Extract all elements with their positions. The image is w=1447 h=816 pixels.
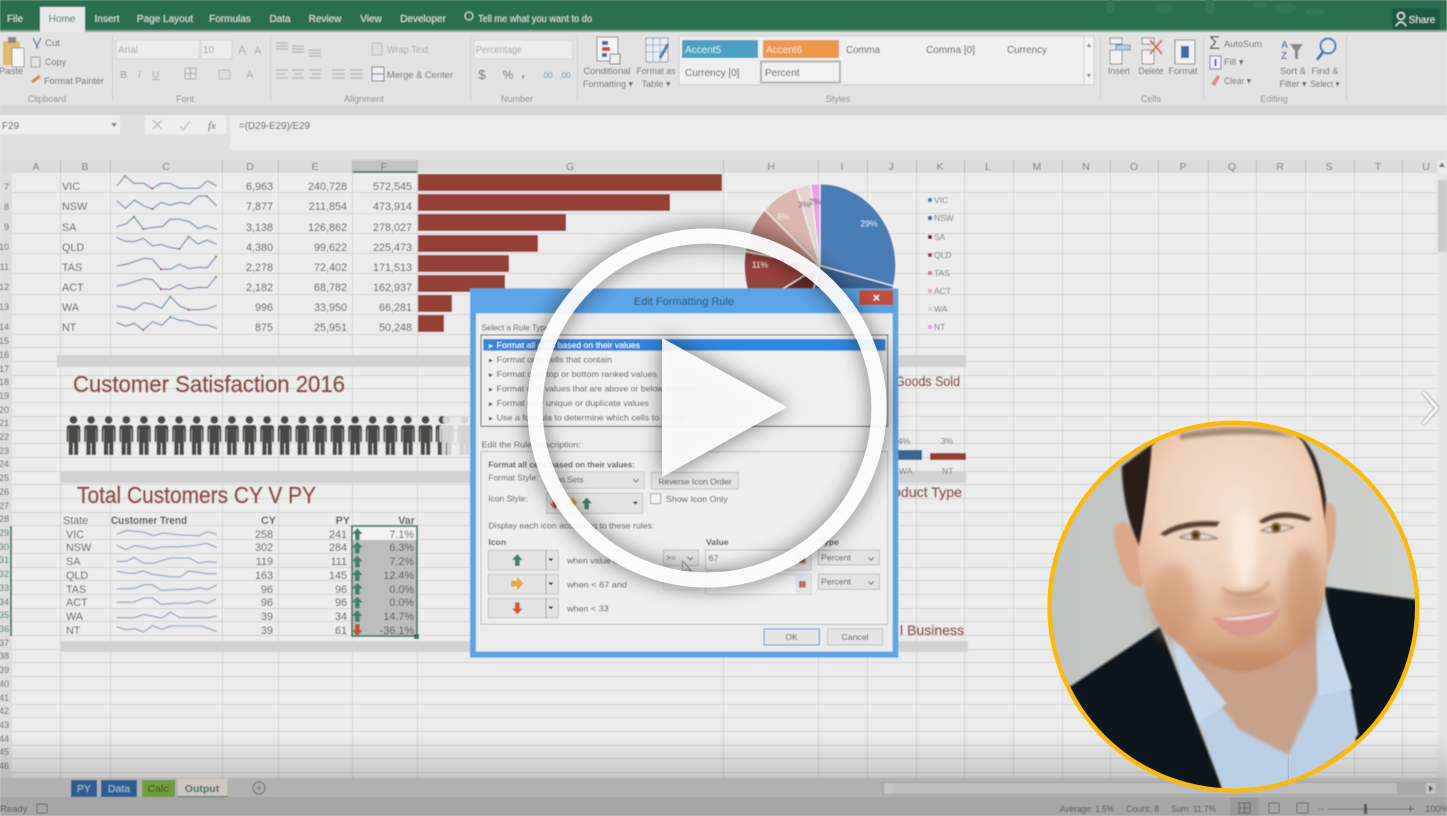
clipboard group: Clipboard: [28, 94, 66, 104]
eyes: [1180, 523, 1293, 540]
column headers: [0, 160, 1437, 173]
editing group: Sort &: [1280, 66, 1307, 77]
state data table: 66,281: [379, 302, 412, 314]
partially hidden chart headings: oduct Type: [893, 484, 962, 500]
state data table: TAS: [62, 262, 82, 274]
state data table: QLD: [62, 242, 84, 254]
alignment group: Wrap Text: [387, 45, 428, 56]
shirt: [1172, 602, 1358, 790]
edit formatting rule dialog: [470, 288, 898, 658]
state data table: NSW: [62, 201, 88, 213]
title bar tabs: Review: [309, 14, 342, 25]
cells group: Format: [1168, 66, 1198, 77]
state data table: 126,862: [308, 222, 347, 234]
rule type list: Format only top or bottom ranked values: [497, 369, 658, 379]
ribbon: [0, 32, 1447, 115]
mouth: [1213, 609, 1281, 637]
number group: ,: [521, 66, 525, 80]
styles gallery: Accent5: [685, 45, 722, 56]
customer table: 284: [329, 542, 347, 554]
sheet tabs bar: [0, 778, 1447, 798]
customer table: 302: [255, 542, 273, 554]
state data table: 171,513: [373, 262, 412, 274]
column headers: T: [1375, 161, 1382, 173]
bottom vignette: [0, 735, 1447, 778]
state data table: 211,854: [309, 201, 347, 213]
customer table: 39: [261, 625, 273, 637]
conditional formatting buttons: Formatting ▾: [583, 79, 633, 90]
pie legend: NT: [934, 322, 945, 332]
partially hidden chart headings: NT: [942, 466, 953, 476]
clipboard group: Copy: [45, 57, 66, 68]
customer table: QLD: [66, 570, 88, 582]
state data table: 25,951: [314, 322, 347, 334]
pie legend: VIC: [934, 195, 948, 205]
column headers: K: [936, 161, 944, 173]
nose: [1223, 581, 1269, 594]
heading: total customers: Total Customers CY V PY: [77, 482, 316, 508]
state data table: 33,950: [314, 302, 347, 314]
face: [1138, 425, 1327, 672]
styles gallery: Styles: [826, 94, 851, 104]
sheet tabs bar: Calc: [147, 783, 169, 795]
cancel button: [828, 629, 883, 645]
state data table: 7,877: [246, 201, 273, 213]
formula bar: [0, 115, 1447, 160]
formula bar: F29: [2, 121, 20, 132]
state data table: 4,380: [246, 242, 273, 254]
customer table: 145: [329, 570, 347, 582]
pie legend: SA: [934, 232, 946, 242]
customer table: Customer Trend: [111, 515, 187, 527]
column headers: O: [1130, 161, 1138, 173]
sparklines with high and low markers: [117, 175, 217, 331]
font group: I: [138, 70, 141, 81]
icon rule rows: when < 67 and: [566, 580, 627, 590]
photo: [1052, 425, 1415, 788]
title bar tabs: Formulas: [209, 14, 251, 25]
state data table: 162,937: [373, 282, 412, 294]
cheek and nose shading: [1150, 510, 1322, 667]
partially hidden chart headings: l Business: [900, 622, 964, 638]
customer table: 258: [255, 529, 273, 541]
customer table: NSW: [66, 542, 92, 554]
editing group: Filter ▾: [1280, 79, 1307, 90]
customer trend sparklines: [117, 530, 217, 632]
rule description box: Icon Sets: [549, 475, 584, 485]
status bar: [0, 797, 1447, 816]
icon rule rows: when < 33: [566, 604, 609, 614]
icon rule rows: 67: [709, 553, 718, 563]
collar: [1172, 602, 1352, 723]
status bar: Ready: [0, 804, 28, 815]
alignment group: Alignment: [344, 94, 385, 104]
customer table: 34: [335, 611, 347, 623]
font group: A: [254, 45, 262, 57]
customer table: PY: [336, 515, 351, 527]
state data table: NT: [62, 322, 77, 334]
state data table: 68,782: [314, 282, 347, 294]
state data table: ACT: [62, 282, 84, 294]
play button: [535, 236, 879, 580]
customer table: WA: [66, 611, 84, 623]
font group: Arial: [118, 45, 138, 56]
title bar tabs: File: [7, 14, 23, 25]
title bar tabs: Data: [269, 14, 291, 25]
customer table: 0.0%: [389, 584, 414, 596]
icon rule rows: Percent: [821, 552, 851, 562]
icon rule rows: when value is: [566, 555, 620, 565]
customer table: 7.2%: [389, 556, 414, 568]
column headers: B: [81, 161, 89, 173]
pie chart: 8%: [777, 212, 790, 222]
presenter portrait: [1040, 410, 1430, 800]
number group: Number: [501, 94, 533, 104]
column headers: S: [1325, 161, 1333, 173]
cells group: Delete: [1138, 66, 1164, 77]
rule type list: Format only values that are above or below average: [497, 384, 698, 394]
column headers: I: [841, 161, 843, 173]
state data table: 50,248: [379, 322, 412, 334]
rule description box: Format Style:: [488, 472, 538, 482]
state data table: 2,182: [246, 282, 273, 294]
customer table: -36.1%: [380, 625, 414, 637]
editing group: AutoSum: [1224, 39, 1262, 50]
customer table: [63, 515, 419, 639]
conditional formatting buttons: Format as: [636, 66, 676, 77]
alignment group: [276, 43, 453, 104]
next slide chevron: [1423, 392, 1437, 424]
customer table: 39: [261, 611, 273, 623]
title bar tabs: Developer: [400, 14, 446, 25]
customer table: VIC: [66, 529, 84, 541]
status bar: Count: 8: [1126, 804, 1159, 815]
rule description box: Show Icon Only: [666, 494, 728, 504]
font group: B: [120, 70, 127, 81]
column headers: G: [566, 161, 574, 173]
hair: [1122, 435, 1326, 550]
pie legend: WA: [934, 304, 948, 314]
editing group: Clear ▾: [1224, 76, 1251, 87]
customer table: 119: [256, 556, 273, 568]
partially hidden chart headings: WA: [899, 466, 913, 476]
pie chart: 29%: [860, 219, 878, 229]
edit formatting rule dialog: Select a Rule Type:: [482, 322, 552, 332]
pie chart: 11%: [752, 260, 769, 270]
rule type list: ►: [488, 372, 494, 379]
styles gallery: Percent: [765, 68, 800, 79]
column headers: F: [381, 161, 387, 173]
state data table: [62, 181, 412, 334]
rule type list: ►: [488, 416, 494, 423]
customer table: CY: [261, 515, 277, 527]
pie legend: NSW: [934, 213, 954, 223]
row headers: 9: [4, 222, 9, 232]
number group: Percentage: [476, 45, 522, 56]
rule description box: Icon: [488, 537, 506, 547]
neck: [1183, 623, 1318, 755]
customer table: NT: [66, 625, 81, 637]
number group: %: [503, 68, 514, 82]
state data table: 473,914: [373, 201, 412, 213]
dialog title: Edit Formatting Rule: [634, 296, 734, 308]
customer table: 7.1%: [389, 529, 414, 541]
icon rule rows: >=: [666, 553, 676, 563]
clipboard group: Format Painter: [44, 76, 104, 87]
customer table: 14.7%: [383, 611, 414, 623]
customer table: 111: [331, 556, 347, 568]
rule type list: Use a formula to determine which cells to format: [497, 413, 687, 423]
column headers: D: [246, 161, 254, 173]
title bar tabs: Share: [1409, 15, 1436, 26]
title bar tabs: Tell me what you want to do: [478, 14, 592, 25]
state data table: 72,402: [314, 262, 347, 274]
font group: Font: [176, 94, 195, 104]
rule type list: Format only unique or duplicate values: [497, 398, 650, 408]
state data table: 225,473: [373, 242, 412, 254]
styles gallery: Currency [0]: [685, 68, 740, 79]
customer table: 6.3%: [389, 542, 414, 554]
customer table: 61: [335, 625, 347, 637]
rule description box: Value: [706, 537, 729, 547]
state data table: 3,138: [246, 222, 273, 234]
jacket: [1060, 587, 1420, 800]
styles gallery: Comma: [846, 45, 880, 56]
clipboard group: Cut: [45, 38, 60, 49]
title bar tabs: [0, 0, 1447, 32]
rule type list: Format only cells that contain: [497, 354, 612, 364]
sheet tabs bar: PY: [77, 783, 91, 795]
customer table: State: [63, 515, 88, 527]
customer table: TAS: [66, 584, 86, 596]
font group: A: [238, 43, 246, 57]
customer table: 0.0%: [389, 597, 414, 609]
conditional formatting buttons: Table ▾: [642, 79, 671, 90]
ok button: [764, 629, 819, 645]
bar chart: [418, 174, 722, 332]
font group: [116, 40, 262, 104]
row headers: 8: [4, 202, 9, 212]
rule type list: ►: [488, 343, 494, 350]
customer table: ACT: [66, 597, 88, 609]
formula bar: =(D29-E29)/E29: [239, 121, 310, 132]
rule description box: Icon Style:: [488, 493, 528, 503]
editing group: A: [1281, 40, 1288, 51]
title bar tabs: View: [360, 14, 383, 25]
pictogram row of people: [66, 416, 472, 455]
section divider bands: [57, 355, 968, 652]
title bar tabs: Home: [49, 14, 76, 25]
rule description box: Format all cells based on their values:: [488, 459, 635, 469]
state data table: 875: [255, 322, 273, 334]
font group: A: [246, 69, 254, 81]
cancel button: Cancel: [842, 632, 869, 642]
cells group: Insert: [1108, 66, 1130, 77]
pie legend: QLD: [934, 250, 951, 260]
rule type list: ►: [488, 387, 494, 394]
state data table: WA: [62, 302, 80, 314]
heading: customer satisfaction: Customer Satisfaction 2016: [73, 371, 345, 397]
row headers: [0, 173, 12, 778]
pie legend: TAS: [934, 268, 950, 278]
styles gallery: Comma [0]: [926, 45, 975, 56]
state data table: 2,278: [246, 262, 273, 274]
partially hidden chart headings: Goods Sold: [895, 373, 960, 389]
title bar tabs: Page Layout: [137, 14, 193, 25]
status bar: Sum: 11.7%: [1171, 804, 1216, 815]
pie legend: ACT: [934, 286, 951, 296]
pie legend: [928, 195, 954, 332]
styles gallery: Accent6: [766, 45, 803, 56]
state data table: 99,622: [314, 242, 347, 254]
sheet tabs bar: Data: [108, 783, 130, 795]
partially hidden chart headings: 3%: [941, 436, 954, 446]
edit formatting rule dialog: Edit the Rule Description:: [482, 439, 581, 449]
eyebrows: [1160, 512, 1312, 536]
alignment group: Merge & Center: [387, 70, 453, 81]
state data table: 240,728: [308, 181, 347, 193]
rule description box: Reverse Icon Order: [658, 476, 732, 486]
customer table: 241: [329, 529, 347, 541]
customer table: 96: [261, 597, 273, 609]
customer table: 96: [261, 584, 273, 596]
pie chart: 3%: [798, 200, 811, 210]
hair wisps at hairline: [1180, 427, 1297, 439]
pie chart: 2%: [809, 197, 822, 207]
rule description box: Type: [819, 537, 839, 547]
number group: .00: [541, 71, 553, 80]
editing group: Z: [1281, 51, 1287, 62]
column headers: R: [1276, 161, 1284, 173]
editing group: Σ: [1209, 33, 1220, 53]
column headers: P: [1179, 161, 1187, 173]
customer table: 96: [335, 584, 347, 596]
conditional formatting buttons: Conditional: [584, 66, 630, 77]
ok button: OK: [785, 632, 798, 642]
conditional formatting buttons: [583, 37, 676, 90]
editing group: [1209, 33, 1340, 104]
vertical scrollbar: [1437, 162, 1447, 778]
mouse cursor: [683, 561, 692, 572]
editing group: Select ▾: [1310, 79, 1340, 90]
icon rule rows: 33: [709, 577, 718, 587]
customer table: 163: [255, 570, 273, 582]
cells group: Cells: [1141, 94, 1161, 104]
font group: U: [152, 70, 159, 81]
customer table: 12.4%: [383, 570, 414, 582]
customer table: Var: [398, 515, 416, 527]
state data table: 278,027: [373, 222, 412, 234]
icon rule rows: Percent: [821, 576, 851, 586]
column headers: Q: [1228, 161, 1236, 173]
rule type list: Format all cells based on their values: [497, 340, 641, 350]
icon rule rows: [488, 550, 879, 618]
customer table: 96: [335, 597, 347, 609]
editing group: Editing: [1260, 94, 1288, 104]
rule type list: ►: [488, 357, 494, 364]
font group: 10: [203, 45, 215, 56]
number group: $: [478, 67, 486, 82]
rule type list: ►: [488, 401, 494, 408]
number group: [474, 40, 573, 104]
editing group: Find &: [1312, 66, 1339, 77]
rule description box: [481, 452, 888, 624]
formula bar: fx: [208, 120, 216, 132]
editing group: Fill ▾: [1224, 57, 1244, 68]
column headers: U: [1422, 161, 1430, 173]
state data table: VIC: [62, 181, 80, 193]
grid lines: [12, 173, 1440, 778]
close button: [859, 290, 893, 305]
cells group: [1108, 38, 1198, 104]
rule type list: [481, 335, 888, 426]
partially hidden chart headings: [893, 373, 966, 638]
column headers: N: [1082, 161, 1090, 173]
styles gallery: Currency: [1007, 45, 1047, 56]
column headers: L: [985, 161, 991, 173]
state data table: 6,963: [246, 181, 273, 193]
sheet tabs bar: Output: [185, 783, 220, 795]
variance icon arrows: [352, 528, 363, 636]
column headers: M: [1033, 161, 1041, 173]
clipboard group: [0, 37, 104, 104]
row headers: 7: [4, 182, 9, 192]
column headers: A: [32, 161, 40, 173]
title bar tabs: Insert: [94, 14, 120, 25]
customer table: SA: [66, 556, 81, 568]
styles gallery: [679, 36, 1094, 104]
column headers: J: [888, 161, 894, 173]
pie chart: [744, 184, 896, 348]
state data table: 996: [255, 302, 273, 314]
status bar: Average: 1.5%: [1060, 804, 1114, 815]
number group: .00: [559, 71, 571, 80]
ears: [1114, 503, 1336, 587]
column headers: E: [311, 161, 319, 173]
column headers: C: [162, 161, 170, 173]
state data table: SA: [62, 222, 77, 234]
state data table: 572,545: [373, 181, 412, 193]
partially hidden chart headings: 4%: [898, 436, 911, 446]
rule description box: Display each icon according to these rules:: [488, 521, 654, 531]
column headers: H: [767, 161, 775, 173]
